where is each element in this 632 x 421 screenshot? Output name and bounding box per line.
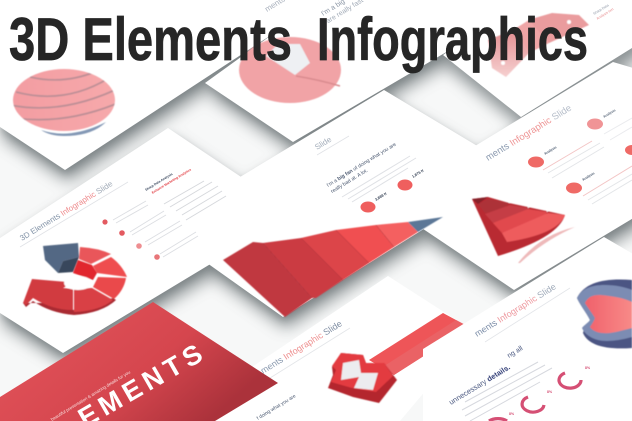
slide heading: ments Infographic Slide: [259, 319, 344, 376]
stat: analysis four: [625, 145, 632, 155]
pyramid chart: [472, 197, 575, 263]
subheading line: [270, 328, 350, 378]
ring labels: 8%: [585, 366, 591, 370]
title: [9, 6, 588, 73]
stat: analysis two: Analysis: [581, 171, 596, 182]
slide: sphere: [0, 0, 340, 170]
detail heading: unnecessary details.: [447, 363, 512, 407]
slide: pie: [205, 0, 535, 142]
sphere chart: [10, 69, 118, 136]
title slide tagline: beautiful presentation & amazing details for you: [50, 369, 132, 421]
3D ribbon chart: [223, 217, 443, 317]
heart chart: [577, 280, 632, 348]
sidebar heading: [144, 163, 192, 197]
heading underline: [20, 182, 128, 247]
stat: analysis one: [528, 141, 604, 178]
sidebar heading: Sharp Data Analysis: [144, 172, 174, 192]
body text: f doing what you are: [256, 393, 297, 421]
heading underline: [317, 136, 349, 155]
stat: value one: [360, 191, 388, 212]
3D cross icon: [328, 353, 397, 403]
slide: arrow cycle: [0, 128, 295, 353]
stat: analysis two: [566, 166, 632, 204]
ring labels: [509, 366, 591, 416]
title slide: [0, 302, 278, 421]
ring labels: 8%: [547, 390, 553, 394]
slide heading: ments Infographic Slide: [473, 282, 558, 339]
card caption: Analysis text: [596, 7, 615, 21]
title: 3D Elements: [9, 6, 292, 73]
stat: value one: 3,888 K: [374, 191, 388, 202]
slide heading: 3D Elements Infographic Slide: [18, 179, 115, 243]
stat: analysis three: [587, 108, 632, 140]
list items: [102, 201, 198, 260]
stat: value two: [398, 168, 425, 190]
subtitle line: [485, 288, 570, 342]
body lines: [342, 156, 416, 202]
detail heading fragment: ng all: [506, 345, 525, 360]
sidebar lines: [164, 181, 226, 220]
ring charts: [489, 373, 581, 421]
statement text: really bad at. A lot.: [330, 168, 369, 195]
slide: cards: [443, 0, 632, 117]
slide heading: Slide: [313, 135, 334, 152]
card caption: [592, 2, 615, 21]
slide: pyramid: [383, 62, 632, 290]
red bar: [369, 313, 469, 375]
stat: value two: 1,876 K: [411, 168, 425, 179]
stat: analysis one: Analysis: [543, 145, 558, 156]
sidebar heading: Enhance Marketing Analytics: [151, 168, 192, 195]
arrow donut chart: [23, 243, 127, 315]
statement text: I'm a big fan of doing what you are: [326, 142, 398, 189]
slide: heart and rings: [423, 237, 632, 421]
slide: bar and cross: [210, 276, 475, 421]
slide heading: ments Infographic Slide: [483, 102, 573, 163]
stat: analysis three: Analysis: [602, 108, 617, 119]
ring labels: 8%: [509, 412, 515, 416]
slide: center stats: [200, 90, 479, 317]
card icons: [488, 13, 589, 77]
card caption: Sharp Data: [592, 3, 610, 16]
body lines: [462, 362, 552, 421]
pie chart: [239, 37, 341, 103]
